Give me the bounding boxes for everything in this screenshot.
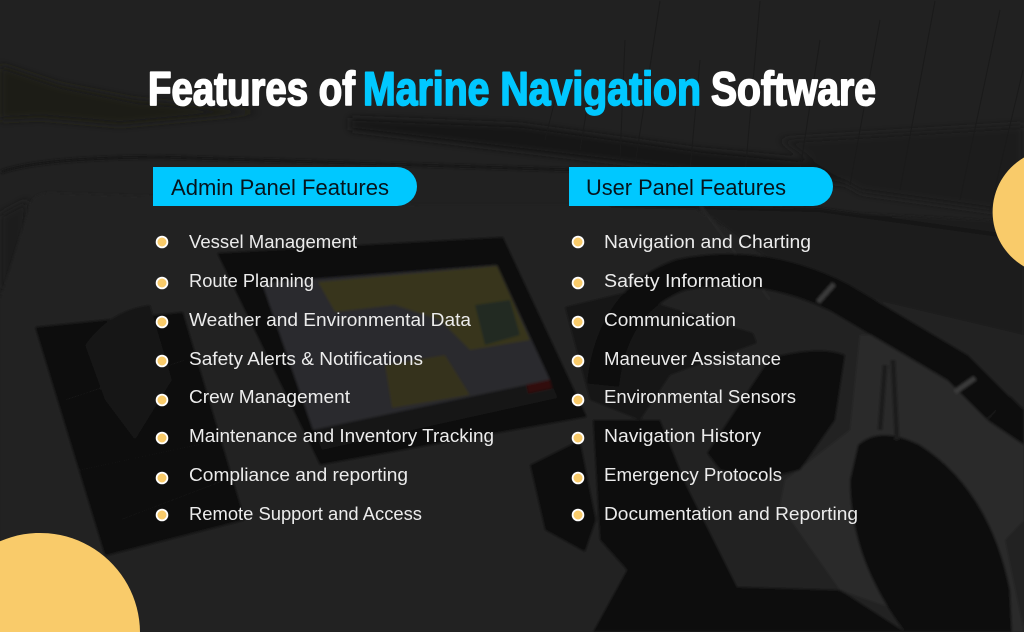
deck surface — [0, 193, 1024, 632]
admin feature list: Weather and Environmental Data — [189, 310, 472, 330]
admin feature list: Remote Support and Access — [189, 504, 422, 524]
user feature list: Documentation and Reporting — [604, 504, 858, 524]
user feature list: Navigation History — [604, 426, 761, 446]
admin feature list: Maintenance and Inventory Tracking — [189, 426, 494, 446]
admin feature list: Route Planning — [189, 271, 314, 291]
user feature list: Environmental Sensors — [604, 387, 796, 407]
title: Features of — [148, 62, 355, 115]
title — [148, 62, 876, 115]
panel: user panel features — [569, 167, 858, 524]
icon: small switch panel — [565, 293, 757, 420]
user feature list: Safety Information — [604, 271, 763, 291]
steering wheel column — [593, 420, 747, 632]
admin feature list: Vessel Management — [189, 232, 357, 252]
heading: user panel features: User Panel Features — [586, 175, 786, 200]
far side of boat — [695, 205, 1024, 335]
heading: user panel features — [569, 167, 833, 206]
user feature list — [573, 232, 858, 524]
user feature list: Maneuver Assistance — [604, 349, 781, 369]
panel: admin panel features — [153, 167, 494, 524]
decorative circle: right edge — [993, 158, 1024, 266]
user feature list: Emergency Protocols — [604, 465, 782, 485]
heading: admin panel features: Admin Panel Features — [171, 175, 389, 200]
icon: chart plotter — [217, 237, 587, 465]
icon: steering wheel rim — [603, 270, 998, 408]
decorative circle: bottom left — [0, 533, 140, 632]
user feature list: Navigation and Charting — [604, 232, 811, 252]
admin feature list: Crew Management — [189, 387, 350, 407]
heading: admin panel features — [153, 167, 417, 206]
user feature list: Communication — [604, 310, 736, 330]
console shapes — [780, 335, 1024, 632]
title: Software — [711, 62, 876, 115]
admin feature list — [157, 232, 494, 524]
admin feature list: Safety Alerts & Notifications — [189, 349, 423, 369]
icon: thruster control panel — [35, 312, 245, 556]
icon: throttle lever — [707, 351, 845, 480]
title: Marine Navigation — [363, 62, 701, 115]
admin feature list: Compliance and reporting — [189, 465, 408, 485]
